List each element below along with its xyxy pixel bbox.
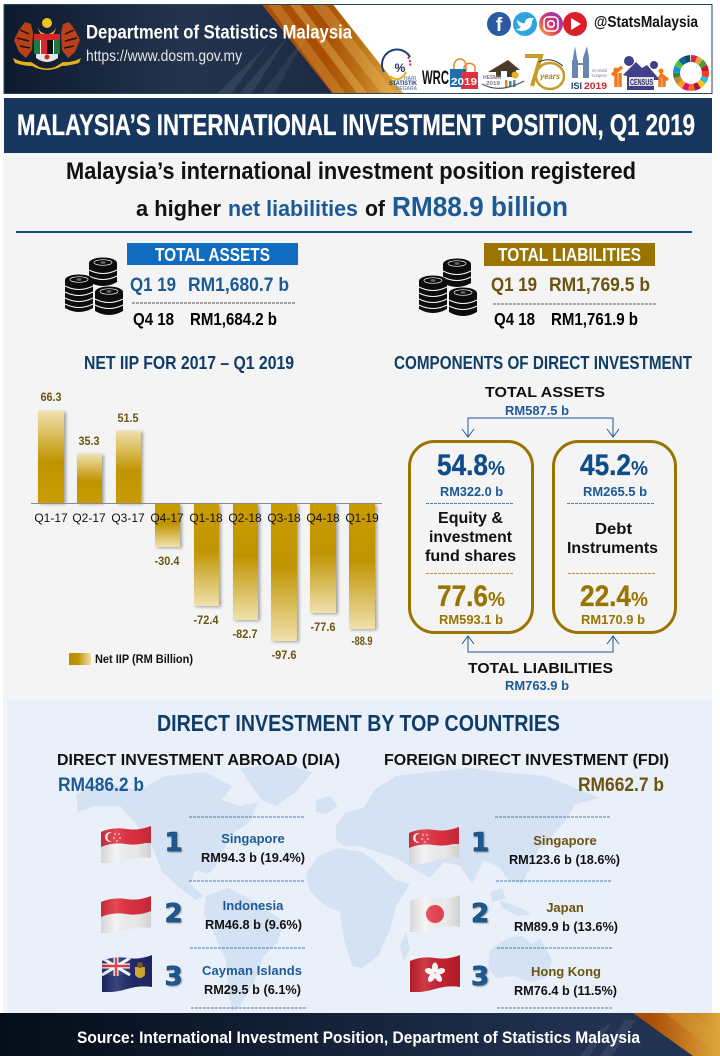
header organisation name: Department of Statistics Malaysia xyxy=(86,22,352,44)
card: equity and investment fund shares: investment xyxy=(429,529,513,546)
title band xyxy=(4,98,712,153)
total assets label: TOTAL ASSETS xyxy=(155,245,270,265)
total liabilities label: TOTAL LIABILITIES xyxy=(498,245,641,265)
total liabilities Q4 18 value: RM1,761.9 b xyxy=(551,309,638,329)
bar chart: net IIP: Q1-19 xyxy=(345,511,379,525)
card: equity and investment fund shares: Equity & xyxy=(438,510,503,527)
arrow: assets bracket xyxy=(462,418,619,437)
card: equity and investment fund shares: fund shares xyxy=(425,548,516,565)
bar chart: net IIP: Q2-17 xyxy=(72,511,106,525)
card: debt instruments: Instruments xyxy=(567,540,658,557)
arrow: liabilities bracket xyxy=(462,636,619,652)
card: debt instruments: RM170.9 b xyxy=(581,612,645,627)
bar chart: net IIP: Q4-17 xyxy=(150,511,184,525)
logo: SDG wheel xyxy=(670,52,712,94)
bar chart: net IIP: Q3-17 xyxy=(111,511,145,525)
bar chart: net IIP: -30.4 xyxy=(154,554,180,568)
bar chart: net IIP: -77.6 xyxy=(310,620,336,634)
total assets Q4 18 value: RM1,684.2 b xyxy=(190,309,277,329)
heading: net IIP chart: NET IIP FOR 2017 – Q1 2019 xyxy=(84,353,294,373)
logo: ISI 2019 xyxy=(571,46,608,92)
header banner xyxy=(4,4,712,94)
logo: Hari Statistik Negara: HARI xyxy=(404,76,416,82)
rank 2: Japan: 2 xyxy=(471,899,489,929)
chart legend: Net IIP (RM Billion) xyxy=(95,652,193,666)
rank 2: Japan: Japan xyxy=(546,900,584,915)
rank 2: Indonesia: 2 xyxy=(164,899,183,929)
logo: 70 years: years xyxy=(539,72,561,81)
section heading: DIRECT INVESTMENT BY TOP COUNTRIES xyxy=(157,710,560,736)
icon: facebook: f xyxy=(496,15,503,36)
logo: Hari Statistik Negara: % xyxy=(395,61,406,75)
rank 1: Singapore: RM123.6 b (18.6%) xyxy=(509,852,620,867)
rank 3: Cayman Islands: Cayman Islands xyxy=(202,963,302,978)
card: debt instruments: % xyxy=(631,589,648,611)
rank 2: Japan: RM89.9 b (13.6%) xyxy=(514,919,618,934)
card: equity and investment fund shares: 77.6 xyxy=(437,580,488,613)
rank 1: Singapore: Singapore xyxy=(221,831,285,846)
FDI heading: FOREIGN DIRECT INVESTMENT (FDI) xyxy=(384,752,669,769)
rank 2: Japan xyxy=(410,895,618,934)
icon: coin stacks xyxy=(65,258,123,315)
rank 1: Singapore: Singapore xyxy=(533,833,597,848)
bar chart: net IIP: -82.7 xyxy=(232,627,258,641)
rank 3: Hong Kong: RM76.4 b (11.5%) xyxy=(514,983,617,998)
logo: HEISMA xyxy=(482,60,524,88)
bar chart: net IIP: Q1-18 xyxy=(189,511,223,525)
bar chart: net IIP xyxy=(31,390,382,666)
panel: components of direct investment xyxy=(410,384,676,693)
headline text: a higher xyxy=(136,196,221,221)
logo: Hari Statistik Negara: NEGARA xyxy=(396,86,417,92)
headline text: Malaysia’s international investment position registered xyxy=(66,158,636,185)
total liabilities Q4 18 value: Q4 18 xyxy=(494,309,535,329)
rank 3: Cayman Islands: RM29.5 b (6.1%) xyxy=(204,982,301,997)
panel: total liabilities xyxy=(419,243,656,329)
panel: total assets xyxy=(65,243,298,329)
column: foreign direct investment xyxy=(384,752,669,1008)
logo: WRC 2019: WRC xyxy=(422,68,449,89)
logo: Hari Statistik Negara: STATISTIK xyxy=(389,81,418,87)
total liabilities heading: TOTAL LIABILITIES xyxy=(468,660,613,677)
logo: WRC 2019: 2019 xyxy=(451,77,478,88)
rank 3: Hong Kong: 3 xyxy=(471,962,489,992)
source text: Source: International Investment Position, Department of Statistics Malaysia xyxy=(77,1028,640,1047)
rank 3: Cayman Islands xyxy=(102,955,302,997)
rank 1: Singapore: 1 xyxy=(471,828,489,858)
logo: WRC 2019 xyxy=(422,59,478,89)
icon: Malaysia coat of arms xyxy=(13,18,81,70)
bar chart: net IIP: 35.3 xyxy=(78,434,100,448)
total assets amount: RM587.5 b xyxy=(505,403,569,418)
rank 1: Singapore: RM94.3 b (19.4%) xyxy=(201,850,305,865)
total assets Q1 19 value: Q1 19 xyxy=(130,275,176,296)
total liabilities Q1 19 value: Q1 19 xyxy=(491,275,537,296)
FDI total: RM662.7 b xyxy=(578,774,664,796)
card: debt instruments xyxy=(554,442,676,632)
logo: ISI 2019: ISI World xyxy=(592,68,607,73)
DIA total: RM486.2 b xyxy=(58,774,144,796)
headline text xyxy=(66,158,636,222)
logo: ISI 2019: Congress xyxy=(592,73,608,78)
column: direct investment abroad xyxy=(57,752,340,1008)
world map background xyxy=(76,764,600,1012)
icon: instagram xyxy=(539,12,563,36)
DIA heading: DIRECT INVESTMENT ABROAD (DIA) xyxy=(57,752,340,769)
header website url: https://www.dosm.gov.my xyxy=(86,48,242,65)
total liabilities Q1 19 value: RM1,769.5 b xyxy=(549,275,650,296)
rank 2: Indonesia: Indonesia xyxy=(223,898,284,913)
total liabilities amount: RM763.9 b xyxy=(505,678,569,693)
bar chart: net IIP: Q3-18 xyxy=(267,511,301,525)
icon: coin stacks xyxy=(419,258,477,316)
icon: twitter xyxy=(513,12,537,36)
card: debt instruments: Debt xyxy=(595,521,633,538)
logo: Hari Statistik Negara xyxy=(382,50,418,92)
logo: Census 2020: CENSUS xyxy=(630,78,653,87)
headline text: net liabilities xyxy=(228,196,358,221)
card: equity and investment fund shares: RM593.1 b xyxy=(439,612,503,627)
bar chart: net IIP: Q2-18 xyxy=(228,511,262,525)
total liabilities Q1 19 value xyxy=(491,275,650,296)
footer source band xyxy=(0,1013,720,1056)
social handle: @StatsMalaysia xyxy=(594,14,698,31)
bar chart: net IIP: -88.9 xyxy=(352,634,373,648)
total assets Q1 19 value xyxy=(130,275,289,296)
logo: 70 years xyxy=(525,56,564,89)
bar chart: net IIP: 66.3 xyxy=(40,390,62,404)
rank 1: Singapore xyxy=(409,827,620,867)
rank 2: Indonesia: RM46.8 b (9.6%) xyxy=(205,917,302,932)
rank 3: Cayman Islands: 3 xyxy=(164,962,183,992)
total assets Q1 19 value: RM1,680.7 b xyxy=(188,275,289,296)
card: debt instruments: RM265.5 b xyxy=(583,484,647,499)
bar chart: net IIP: -72.4 xyxy=(194,613,219,627)
card: debt instruments: 22.4 xyxy=(580,580,631,613)
card: equity and investment fund shares: 54.8 xyxy=(437,449,488,482)
total assets heading: TOTAL ASSETS xyxy=(485,384,605,401)
icon: youtube xyxy=(563,12,587,36)
logo: ISI 2019: ISI xyxy=(571,81,582,92)
rank 2: Indonesia xyxy=(101,896,302,933)
bar chart: net IIP: -97.6 xyxy=(272,648,297,662)
panel: direct investment by top countries xyxy=(7,700,712,1013)
total assets Q4 18 value xyxy=(133,309,277,329)
bar chart: net IIP: Q1-17 xyxy=(34,511,68,525)
card: equity and investment fund shares: RM322.0 b xyxy=(440,484,503,499)
bar chart: net IIP: 51.5 xyxy=(118,411,139,425)
card: debt instruments: % xyxy=(631,458,648,480)
rank 1: Singapore xyxy=(101,826,305,865)
logo: Census 2020 xyxy=(612,56,668,90)
bar chart: net IIP: Q4-18 xyxy=(306,511,340,525)
card: equity and investment fund shares: % xyxy=(488,458,505,480)
total assets Q4 18 value: Q4 18 xyxy=(133,309,174,329)
total liabilities Q4 18 value xyxy=(494,309,638,329)
headline text: RM88.9 billion xyxy=(392,191,568,222)
headline text: of xyxy=(365,196,385,221)
card: equity and investment fund shares: % xyxy=(488,589,505,611)
rank 3: Hong Kong: Hong Kong xyxy=(531,964,601,979)
logo: HEISMA: HESMA xyxy=(483,75,501,81)
icon: facebook xyxy=(487,12,511,36)
logo: HEISMA: 2019 xyxy=(486,81,500,87)
card: debt instruments: 45.2 xyxy=(580,449,631,482)
logo: ISI 2019: 2019 xyxy=(584,81,607,92)
card: equity and investment fund shares xyxy=(410,442,532,632)
rank 3: Hong Kong xyxy=(410,955,617,998)
rank 1: Singapore: 1 xyxy=(164,828,183,858)
